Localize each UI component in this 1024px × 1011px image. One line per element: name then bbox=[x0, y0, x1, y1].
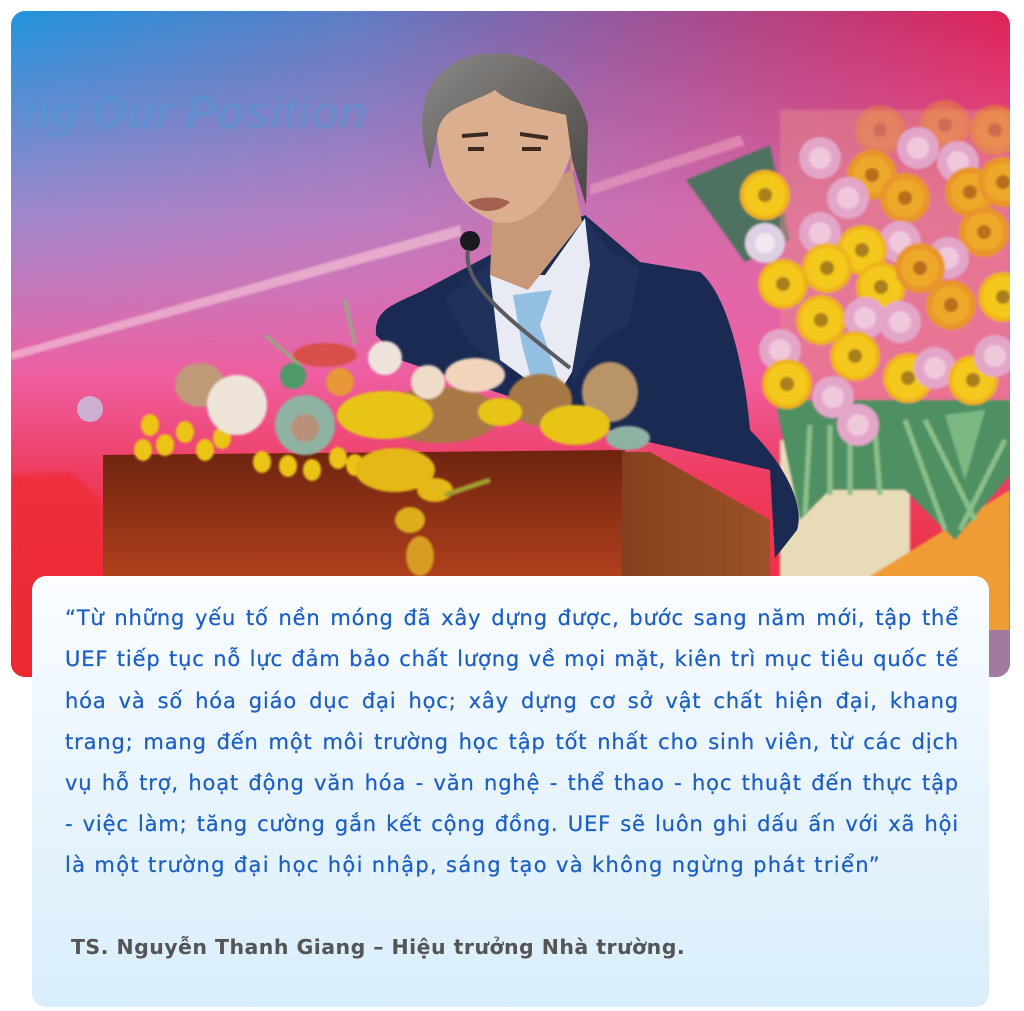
podium flowers bbox=[134, 300, 650, 576]
right flower bouquet bbox=[686, 100, 1024, 677]
text: trang; mang đến một môi trường học tập tốt nhất cho sinh viên, từ các dịch bbox=[65, 730, 959, 754]
eyes and mouth bbox=[462, 134, 548, 138]
quote text bbox=[65, 606, 959, 877]
shirt bbox=[490, 218, 590, 400]
suit bbox=[376, 215, 799, 558]
faded backdrop slogan: ng Our Position bbox=[22, 86, 367, 138]
text: là một trường đại học hội nhập, sáng tạo và không ngừng phát triển” bbox=[65, 853, 881, 877]
microphone bbox=[460, 231, 480, 251]
hair bbox=[422, 53, 588, 205]
face bbox=[437, 80, 572, 223]
right edge lower strip bbox=[988, 630, 1010, 677]
quote card bbox=[32, 576, 989, 1007]
speaker bbox=[376, 53, 799, 558]
text: - việc làm; tăng cường gắn kết cộng đồng. UEF sẽ luôn ghi dấu ấn với xã hội bbox=[65, 812, 959, 836]
tie bbox=[513, 290, 558, 380]
icon: bokeh dot bbox=[77, 396, 103, 422]
text: UEF tiếp tục nỗ lực đảm bảo chất lượng về mọi mặt, kiên trì mục tiêu quốc tế bbox=[65, 647, 959, 671]
text: hóa và số hóa giáo dục đại học; xây dựng cơ sở vật chất hiện đại, khang bbox=[65, 689, 959, 713]
podium bbox=[103, 450, 770, 580]
neck bbox=[490, 170, 582, 290]
signature: TS. Nguyễn Thanh Giang – Hiệu trưởng Nhà trường. bbox=[71, 935, 685, 959]
background gradient bbox=[11, 11, 1010, 677]
text: vụ hỗ trợ, hoạt động văn hóa - văn nghệ - thể thao - học thuật đến thực tập bbox=[65, 771, 959, 795]
text: “Từ những yếu tố nền móng đã xây dựng được, bước sang năm mới, tập thể bbox=[65, 606, 959, 630]
photo panel: speaker at podium with flowers bbox=[11, 11, 1010, 677]
